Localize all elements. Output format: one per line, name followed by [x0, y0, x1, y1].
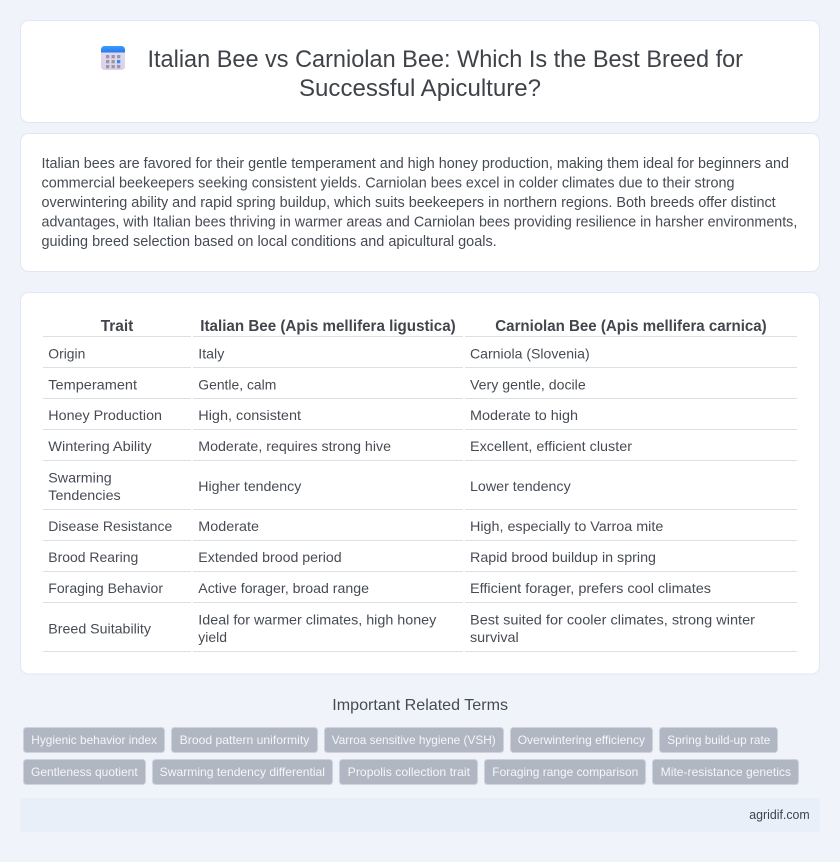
row: origin: Italy [198, 345, 224, 361]
row: origin: Carniola (Slovenia) [470, 345, 590, 361]
text block: intro paragraph: advantages, with Italian bees thriving in warmer areas and Carniolan bees providing resilience in harsher environments, [42, 214, 797, 230]
tag: foraging range comparison: Foraging range comparison [492, 765, 638, 779]
row: breed suitability: survival [470, 629, 519, 645]
tag: foraging range comparison [484, 760, 646, 784]
title [148, 46, 743, 102]
table header row: Italian Bee (Apis mellifera ligustica) [200, 318, 456, 335]
table header row: Trait [101, 318, 134, 335]
row: honey production: Honey Production [48, 407, 162, 423]
row: foraging behavior: Foraging Behavior [48, 580, 163, 596]
row: wintering ability [43, 438, 797, 461]
row: swarming tendencies: Lower tendency [470, 478, 571, 494]
text block: intro paragraph: Italian bees are favored for their gentle temperament and high honey production, making them ideal for beginners and [42, 156, 789, 172]
tag: hygienic behavior index: Hygienic behavior index [31, 733, 157, 747]
row: breed suitability: yield [198, 629, 227, 645]
row: origin: Origin [48, 345, 85, 361]
panel: comparison table [20, 292, 820, 674]
tag: spring build-up rate: Spring build-up rate [667, 733, 771, 747]
tag: overwintering efficiency: Overwintering efficiency [518, 733, 645, 747]
panel: title card [20, 20, 820, 122]
row: breed suitability: Ideal for warmer climates, high honey [198, 611, 436, 627]
row: temperament: Very gentle, docile [470, 376, 586, 392]
tag: hygienic behavior index [24, 728, 164, 752]
row: brood rearing: Brood Rearing [48, 549, 138, 565]
row: wintering ability: Wintering Ability [48, 438, 152, 454]
tag: mite-resistance genetics [652, 760, 798, 784]
tag: varroa sensitive hygiene [324, 728, 504, 752]
title: Successful Apiculture? [299, 75, 541, 102]
title: Italian Bee vs Carniolan Bee: Which Is the Best Breed for [148, 46, 743, 73]
footer source text: agridif.com [749, 807, 810, 822]
tag: spring build-up rate [660, 728, 778, 752]
table header row [43, 318, 797, 337]
tag: overwintering efficiency [510, 728, 652, 752]
row: foraging behavior: Active forager, broad range [198, 580, 369, 596]
tag: swarming tendency differential: Swarming tendency differential [160, 765, 325, 779]
row: wintering ability: Excellent, efficient cluster [470, 438, 632, 454]
tag: swarming tendency differential [152, 760, 332, 784]
row: brood rearing: Rapid brood buildup in spring [470, 549, 656, 565]
icon: calendar [101, 46, 125, 70]
row: brood rearing [43, 549, 797, 572]
text block: intro paragraph: commercial beekeepers seeking consistent yields. Carniolan bees excel in colder climates due to their strong [42, 176, 734, 192]
row: foraging behavior: Efficient forager, prefers cool climates [470, 580, 711, 596]
text block: intro paragraph: overwintering ability and rapid spring buildup, which suits beekeepers in northern regions. Both breeds offer distinct [42, 195, 776, 211]
row: honey production: High, consistent [198, 407, 301, 423]
row: breed suitability: Breed Suitability [48, 620, 151, 636]
tag: brood pattern uniformity [172, 728, 318, 752]
row: swarming tendencies: Swarming [48, 469, 112, 485]
text block: intro paragraph: guiding breed selection based on local conditions and apicultural goals. [42, 234, 497, 250]
tag: gentleness quotient [24, 760, 146, 784]
row: origin [43, 345, 797, 368]
panel: related term tags [24, 728, 798, 784]
tag: varroa sensitive hygiene: Varroa sensitive hygiene (VSH) [332, 733, 496, 747]
row: disease resistance: Moderate [198, 518, 259, 534]
table header row: Carniolan Bee (Apis mellifera carnica) [495, 318, 767, 335]
tag: gentleness quotient: Gentleness quotient [31, 765, 138, 779]
row: brood rearing: Extended brood period [198, 549, 342, 565]
tag: brood pattern uniformity: Brood pattern uniformity [180, 733, 309, 747]
row: temperament [43, 376, 797, 399]
row: wintering ability: Moderate, requires strong hive [198, 438, 391, 454]
tag: propolis collection trait [340, 760, 478, 784]
panel: introduction text [20, 134, 820, 272]
tag: mite-resistance genetics: Mite-resistance genetics [661, 765, 791, 779]
row: breed suitability: Best suited for cooler climates, strong winter [470, 611, 755, 627]
tag: propolis collection trait: Propolis collection trait [348, 765, 471, 779]
footer bar [20, 798, 820, 832]
text block: intro paragraph [42, 156, 797, 250]
row: swarming tendencies: Tendencies [48, 487, 121, 503]
row: swarming tendencies [43, 469, 797, 510]
row: honey production: Moderate to high [470, 407, 578, 423]
heading: important related terms: Important Related Terms [332, 697, 508, 714]
row: swarming tendencies: Higher tendency [198, 478, 301, 494]
row: disease resistance [43, 518, 797, 541]
row: disease resistance: High, especially to Varroa mite [470, 518, 664, 534]
row: honey production [43, 407, 797, 430]
row: temperament: Gentle, calm [198, 376, 276, 392]
row: disease resistance: Disease Resistance [48, 518, 173, 534]
row: foraging behavior [43, 580, 797, 603]
row: temperament: Temperament [48, 376, 137, 392]
row: breed suitability [43, 611, 797, 652]
